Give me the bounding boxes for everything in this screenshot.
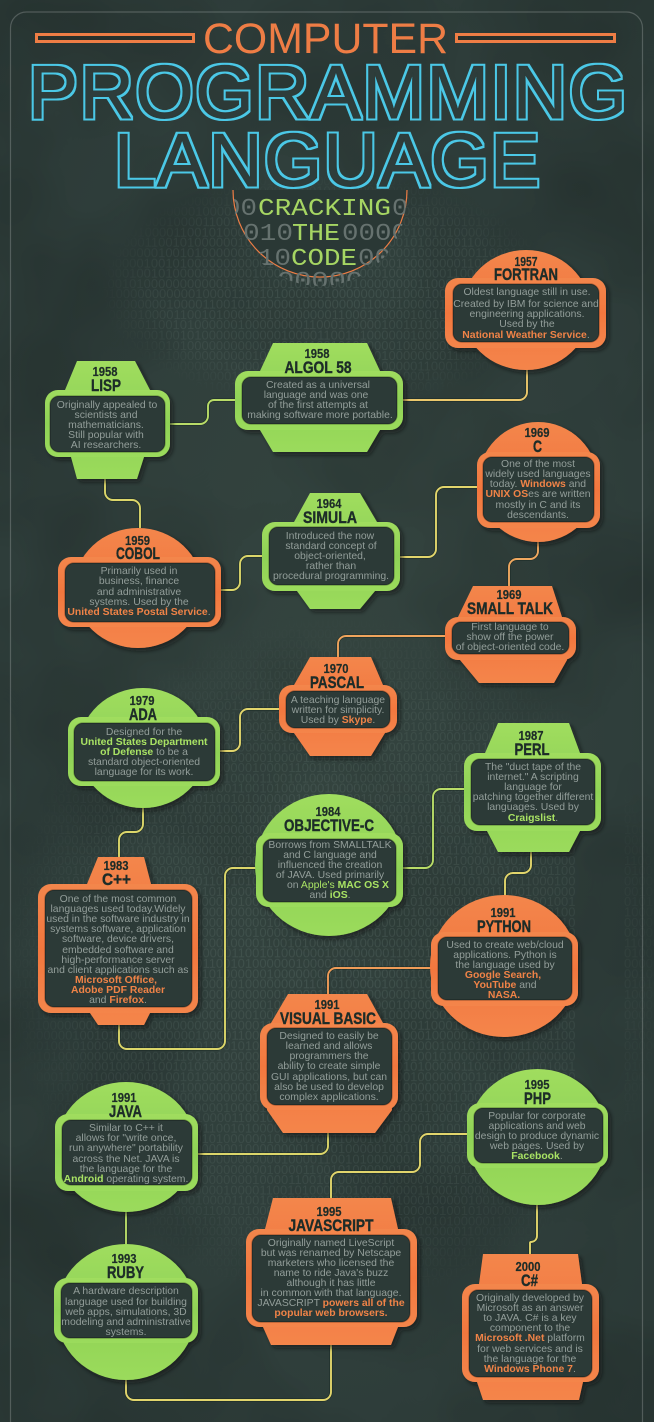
node: c [477, 422, 600, 542]
javascript description: name to ride Java's buzz [274, 1268, 388, 1279]
c# description: Windows Phone 7. [484, 1364, 576, 1375]
perl year: 1987 [518, 729, 544, 743]
ruby year: 1993 [112, 1252, 137, 1266]
connector: java to ruby [124, 1212, 128, 1244]
objective-c shape [255, 794, 403, 936]
php year: 1995 [524, 1078, 550, 1092]
connector: objective-c to perl [403, 789, 464, 868]
c++ description: and Firefox. [89, 995, 147, 1006]
objective-c description: on Apple's MAC OS X [287, 880, 389, 891]
objective-c panel [263, 839, 396, 902]
python description: NASA. [488, 990, 520, 1001]
perl description: languages. Used by [487, 802, 580, 813]
lisp description: Originally appealed to [57, 400, 157, 411]
c++ description: and client applications such as [48, 965, 188, 976]
javascript description: popular web browsers. [274, 1308, 388, 1319]
connector: cobol to simula [221, 556, 262, 590]
connector: simula to c [400, 487, 477, 557]
ada shape [68, 688, 220, 808]
node: small talk [445, 586, 576, 683]
c++ description: software, device drivers, [62, 934, 174, 945]
visual basic description: ability to create simple [278, 1061, 381, 1072]
fortran description: Oldest language still in use. [463, 287, 591, 298]
php panel [474, 1108, 603, 1163]
visual basic name: VISUAL BASIC [280, 1009, 376, 1028]
connector: php to c# [530, 1205, 537, 1254]
objective-c description: Borrows from SMALLTALK [268, 840, 392, 851]
connector: fortran to algol [403, 369, 527, 400]
ada year: 1979 [130, 694, 155, 708]
node: python [430, 895, 578, 1037]
perl name: PERL [514, 740, 550, 759]
small talk name: SMALL TALK [467, 599, 554, 618]
algol name: ALGOL 58 [284, 358, 352, 377]
cobol description: systems. Used by the [89, 597, 189, 608]
objective-c description: of JAVA. Used primarily [276, 870, 385, 881]
fortran description: National Weather Service. [462, 330, 590, 341]
perl description: The "duct tape of the [485, 762, 581, 773]
node: java [55, 1082, 198, 1212]
cobol name: COBOL [116, 544, 160, 563]
simula shape [262, 493, 400, 609]
python panel [438, 937, 572, 1000]
simula description: object-oriented, [294, 551, 366, 562]
visual basic description: also be used to develop [274, 1082, 384, 1093]
ruby description [61, 1286, 191, 1338]
ruby shape [54, 1244, 198, 1380]
small talk year: 1969 [496, 588, 522, 602]
objective-c description: and iOS. [309, 890, 351, 901]
connectors [105, 369, 538, 1400]
binary digits inside the badge: 00 [358, 246, 391, 273]
binary digits inside the badge: 00 [224, 196, 257, 223]
c# description: for web services and is [477, 1344, 583, 1355]
subtitle badge: cracking the code [232, 190, 408, 286]
title rule right [456, 34, 614, 42]
php description: applications and web [488, 1121, 586, 1132]
lisp description: AI researchers. [71, 440, 141, 451]
fortran description [453, 287, 599, 341]
node: c++ [38, 857, 198, 1025]
php description: design to produce dynamic [475, 1131, 599, 1142]
c# description: Microsoft .Net platform [475, 1333, 585, 1344]
c++ description: embedded software and [62, 945, 174, 956]
objective-c year: 1984 [316, 805, 341, 819]
simula description: standard concept of [285, 541, 377, 552]
node: php [467, 1069, 608, 1205]
connector: visual basic to java [198, 1133, 328, 1154]
visual basic description: GUI applications, but can [271, 1072, 387, 1083]
c# year: 2000 [516, 1260, 541, 1274]
visual basic description [271, 1031, 387, 1103]
badge circle [233, 190, 407, 277]
java name: JAVA [109, 1102, 142, 1121]
visual basic description: complex applications. [279, 1092, 379, 1103]
algol panel [242, 377, 397, 424]
perl panel [471, 759, 595, 825]
visual basic year: 1991 [314, 998, 340, 1012]
cobol description: United States Postal Service. [67, 607, 211, 618]
objective-c name: OBJECTIVE-C [284, 816, 374, 835]
ada description: Designed for the [106, 727, 182, 738]
java year: 1991 [112, 1091, 137, 1105]
lisp year: 1958 [92, 365, 118, 379]
php description: web pages. Used by [489, 1141, 585, 1152]
javascript name: JAVASCRIPT [288, 1216, 374, 1235]
algol description: making software more portable. [247, 410, 393, 421]
title: computer: COMPUTER [203, 15, 448, 63]
perl description: language for [504, 782, 562, 793]
javascript description: in common with that language. [261, 1288, 401, 1299]
perl description: internet." A scripting [487, 772, 579, 783]
node: cobol [58, 528, 221, 648]
javascript description: JAVASCRIPT powers all of the [257, 1298, 405, 1309]
ruby name: RUBY [107, 1263, 145, 1282]
objective-c description: and C language and [283, 850, 377, 861]
c description: mostly in C and its [496, 500, 580, 511]
small talk description: First language to [471, 622, 549, 633]
c# description [475, 1293, 585, 1375]
title rule left [36, 34, 194, 42]
lisp description [57, 400, 157, 451]
binary digits inside the badge [234, 198, 406, 286]
ruby description: language used for building [65, 1297, 187, 1308]
binary digits inside the badge: 0000 [342, 221, 408, 248]
cobol description: and administrative [97, 587, 181, 598]
c++ description: Microsoft Office, [75, 975, 157, 986]
java description: run anywhere" portability [69, 1143, 184, 1154]
node: fortran [445, 250, 606, 370]
node: pascal [279, 657, 397, 756]
python description: YouTube and [473, 980, 537, 991]
fortran description: Created by IBM for science and [453, 299, 599, 310]
python description [446, 940, 564, 1001]
php description [475, 1111, 599, 1162]
java shape [55, 1082, 198, 1212]
ruby description: A hardware description [73, 1286, 179, 1297]
c# name: C# [521, 1271, 538, 1290]
connector: pascal to ada [220, 709, 279, 751]
pascal description: Used by Skype. [301, 715, 375, 726]
subtitle text: CRACKING [258, 196, 391, 223]
pascal description [291, 695, 385, 726]
pascal panel [286, 691, 390, 728]
c shape [477, 422, 600, 542]
algol description: language and was one [264, 390, 369, 401]
c++ year: 1983 [104, 859, 129, 873]
fortran description: engineering applications. [470, 309, 584, 320]
c++ description [46, 894, 190, 1006]
cobol description [67, 566, 211, 618]
simula description: Introduced the now [286, 531, 375, 542]
fortran year: 1957 [514, 255, 538, 269]
subtitle text: CODE [291, 246, 357, 273]
cobol description: business, finance [99, 576, 179, 587]
c description: descendants. [507, 510, 569, 521]
visual basic shape [260, 994, 398, 1133]
php shape [467, 1069, 608, 1205]
python description: Used to create web/cloud [446, 940, 564, 951]
c++ description: systems software, application [50, 924, 186, 935]
lisp panel [50, 396, 165, 452]
fortran name: FORTRAN [494, 265, 558, 284]
perl description [473, 762, 593, 824]
title block [28, 15, 627, 202]
python description: the language used by [455, 960, 555, 971]
python description: Google Search, [465, 970, 541, 981]
c++ panel [45, 890, 192, 1007]
javascript panel [252, 1235, 410, 1322]
cobol description: Primarily used in [101, 566, 178, 577]
c description: UNIX OSes are written [485, 489, 591, 500]
cobol panel [65, 563, 215, 622]
simula description [273, 531, 389, 582]
lisp description: Still popular with [68, 430, 144, 441]
python name: PYTHON [477, 917, 531, 936]
node: javascript [246, 1198, 417, 1345]
ruby description: modeling and administrative [61, 1317, 191, 1328]
small talk description: show off the power [466, 632, 554, 643]
algol description: Created as a universal [266, 380, 370, 391]
node: simula [262, 493, 400, 609]
ruby description: systems. [106, 1327, 146, 1338]
ada description: language for its work. [95, 767, 193, 778]
php description: Popular for corporate [488, 1111, 586, 1122]
ruby description: web apps, simulations, 3D [64, 1307, 187, 1318]
ada panel [74, 723, 215, 781]
lisp description: mathematicians. [68, 420, 144, 431]
pascal name: PASCAL [310, 673, 364, 692]
c# description: the language for the [484, 1354, 576, 1365]
simula description: procedural programming. [273, 571, 389, 582]
c++ name: C++ [102, 870, 131, 889]
java description [64, 1123, 188, 1185]
visual basic description: learned and allows [286, 1041, 372, 1052]
objective-c description: influenced the creation [278, 860, 382, 871]
pascal shape [279, 657, 397, 756]
simula year: 1964 [316, 497, 342, 511]
python shape [430, 895, 578, 1037]
connector: javascript to php [331, 1134, 467, 1198]
perl description: patching together different [473, 792, 593, 803]
c panel [483, 457, 594, 522]
algol shape [235, 343, 403, 452]
connector: lisp to cobol [105, 479, 140, 528]
c++ description: languages used today.Widely [51, 904, 186, 915]
simula panel [269, 527, 394, 585]
small talk description: of object-oriented code. [456, 642, 564, 653]
javascript description: but was renamed by Netscape [261, 1248, 401, 1259]
connector: algol to lisp [170, 400, 235, 424]
lisp shape [45, 361, 170, 479]
small talk shape [445, 586, 576, 683]
c description: widely used languages [484, 469, 591, 480]
algol description [247, 380, 393, 421]
c# description: Microsoft as an answer [477, 1303, 584, 1314]
node: algol 58 [235, 343, 403, 452]
c# shape [462, 1254, 599, 1400]
c# description: Originally developed by [476, 1293, 585, 1304]
ada description: of Defense to be a [100, 747, 188, 758]
algol year: 1958 [304, 347, 330, 361]
objective-c description [268, 840, 392, 901]
node: visual basic [260, 994, 398, 1133]
node: c# [462, 1254, 599, 1400]
title: language: LANGUAGE [114, 118, 540, 202]
simula description: rather than [306, 561, 356, 572]
algol description: of the first attempts at [268, 400, 368, 411]
ada name: ADA [129, 705, 157, 724]
lisp name: LISP [91, 376, 121, 395]
c description: One of the most [501, 459, 575, 470]
c++ description: used in the software industry in [46, 914, 190, 925]
title: programming: PROGRAMMING [28, 50, 627, 134]
c# description: to JAVA. C# is a key [483, 1313, 577, 1324]
java description: the language for the [80, 1164, 172, 1175]
python description: applications. Python is [453, 950, 557, 961]
binary digits inside the badge: 10 [258, 246, 291, 273]
pascal year: 1970 [324, 662, 349, 676]
ada description [80, 727, 208, 778]
c description: today. Windows and [490, 479, 586, 490]
visual basic panel [267, 1028, 392, 1105]
connector: python to visual basic [328, 968, 431, 994]
java description: Similar to C++ it [89, 1123, 163, 1134]
javascript year: 1995 [316, 1205, 342, 1219]
c# description: component to the [490, 1323, 570, 1334]
javascript description: marketers who licensed the [268, 1258, 394, 1269]
c# panel [469, 1290, 592, 1377]
c year: 1969 [524, 426, 550, 440]
ruby panel [61, 1283, 192, 1338]
java description: allows for "write once, [76, 1133, 176, 1144]
python year: 1991 [490, 906, 516, 920]
node: lisp [45, 361, 170, 479]
node: perl [464, 723, 601, 852]
php name: PHP [524, 1089, 551, 1108]
pascal description: A teaching language [291, 695, 385, 706]
javascript shape [246, 1198, 417, 1345]
connector: small talk to pascal [338, 636, 445, 657]
connector: c to small talk [509, 542, 538, 586]
c++ description: One of the most common [60, 894, 177, 905]
javascript description: although it has little [287, 1278, 376, 1289]
small talk description [456, 622, 564, 653]
binary digits inside the badge: 010 [243, 221, 293, 248]
simula name: SIMULA [303, 508, 357, 527]
java description: Android operating system. [64, 1174, 188, 1185]
subtitle text [258, 196, 391, 273]
connector: ada to c++ [119, 808, 143, 857]
visual basic description: programmers the [289, 1051, 369, 1062]
connector: ruby to javascript [126, 1345, 331, 1400]
visual basic description: Designed to easily be [279, 1031, 379, 1042]
c name: C [533, 437, 542, 456]
javascript description [257, 1238, 405, 1319]
ada description: United States Department [80, 737, 208, 748]
node: objective-c [255, 794, 403, 936]
cobol year: 1959 [125, 534, 150, 548]
fortran shape [445, 250, 606, 370]
javascript description: Originally named LiveScript [268, 1238, 394, 1249]
pascal description: written for simplicity. [291, 705, 384, 716]
c++ description: Adobe PDF Reader [71, 985, 165, 996]
cobol shape [58, 528, 221, 648]
small talk panel [452, 622, 569, 654]
binary digits inside the badge: 00000 [277, 269, 363, 296]
subtitle text: THE [292, 221, 340, 248]
connector: c++ to objective-c [119, 868, 256, 1049]
php description: Facebook. [511, 1151, 563, 1162]
node: ada [68, 688, 220, 808]
binary digits inside the badge: 0 [392, 196, 408, 223]
perl description: Craigslist. [508, 813, 558, 824]
c description [484, 459, 591, 521]
connector: perl to python [505, 852, 531, 896]
node: ruby [54, 1244, 198, 1380]
fortran panel [453, 284, 599, 342]
badge arc [233, 190, 407, 277]
perl shape [464, 723, 601, 852]
java panel [62, 1120, 192, 1185]
c++ description: high-performance server [61, 955, 175, 966]
lisp description: scientists and [75, 410, 138, 421]
c++ shape [38, 857, 198, 1025]
java description: across the Net. JAVA is [72, 1154, 180, 1165]
ada description: standard object-oriented [88, 757, 200, 768]
fortran description: Used by the [499, 319, 555, 330]
